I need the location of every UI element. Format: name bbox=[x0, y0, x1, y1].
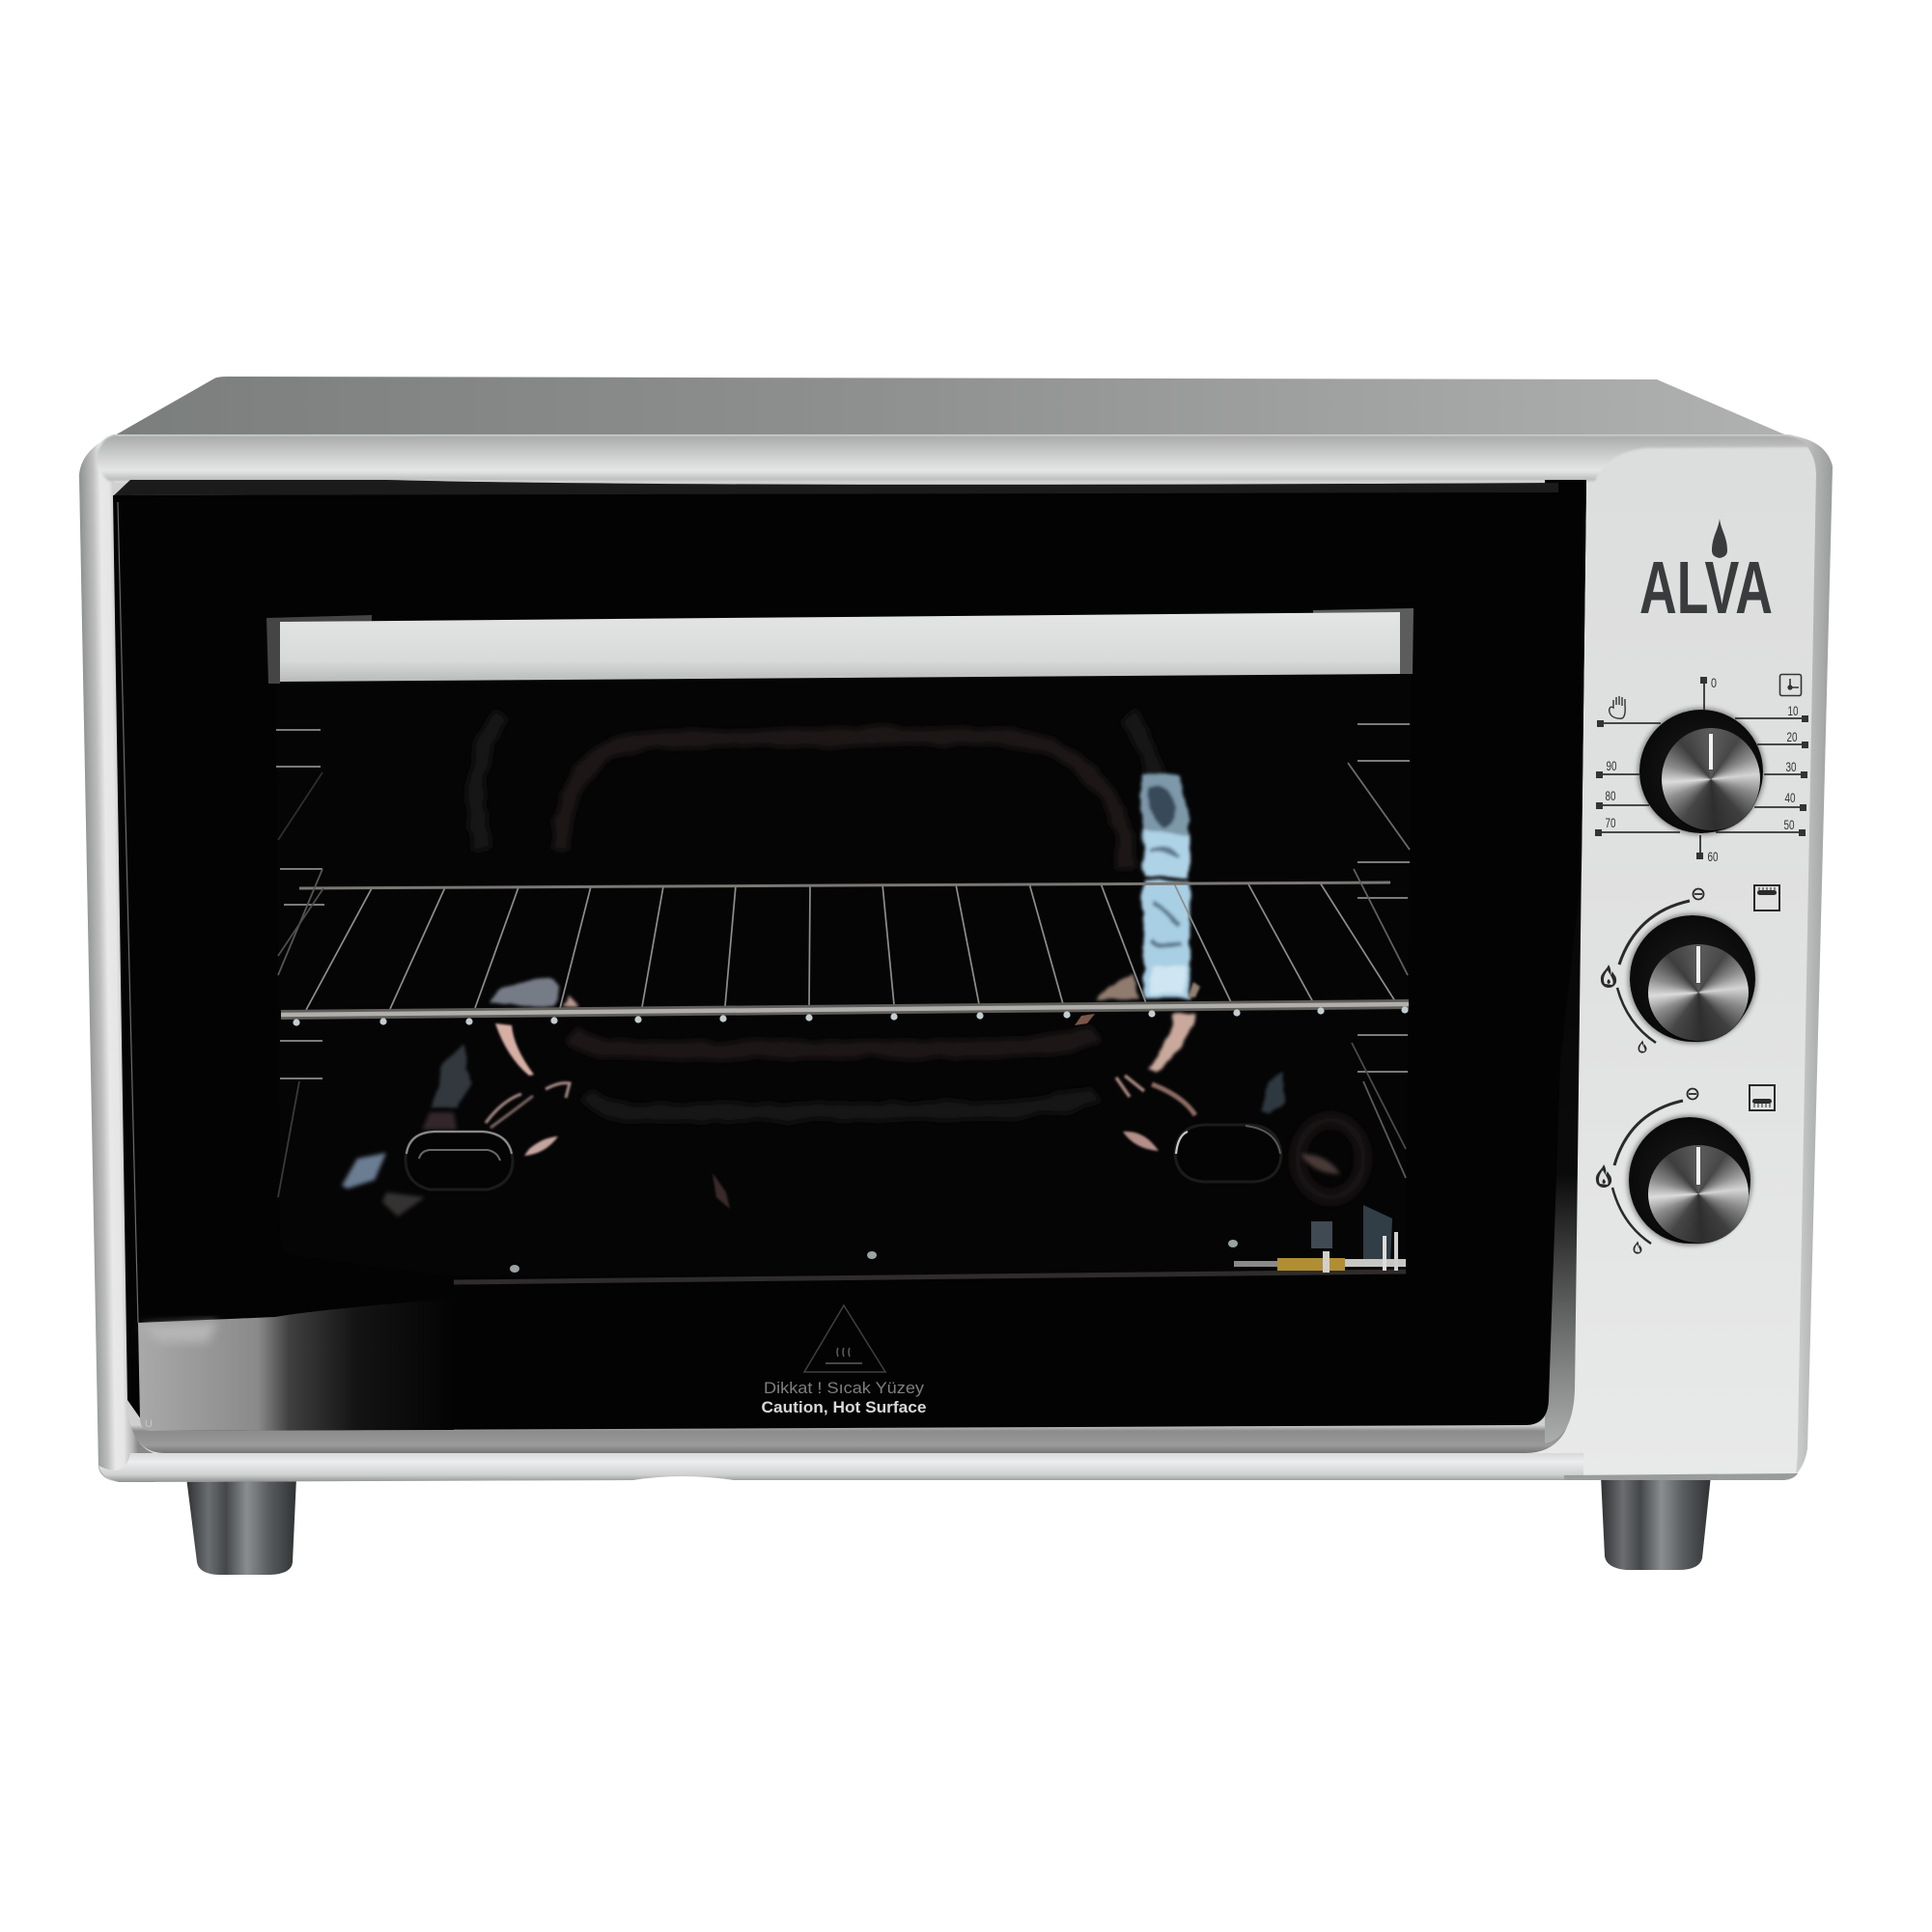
knob: timer bbox=[1635, 705, 1768, 838]
icon: timer clock bbox=[1780, 674, 1802, 695]
top wedge of door bbox=[114, 480, 1558, 495]
off symbol bbox=[1688, 1089, 1697, 1099]
hot surface symbol bbox=[826, 1348, 862, 1363]
scale numbers: 80 bbox=[1605, 788, 1616, 803]
knob: top burner bbox=[1625, 910, 1760, 1047]
oven top surface bbox=[113, 377, 1789, 436]
scale numbers bbox=[1605, 675, 1799, 864]
icon: large flame bbox=[1601, 965, 1616, 988]
rack front bar bbox=[281, 1004, 1409, 1015]
faint heating element reflections bbox=[476, 714, 1160, 1113]
left side band bbox=[79, 434, 164, 1482]
handle left bracket bbox=[266, 615, 372, 684]
scale numbers: 30 bbox=[1786, 759, 1797, 774]
lower frame band bbox=[98, 1453, 1583, 1482]
pink streak, right bbox=[1148, 1014, 1194, 1072]
bottom burner dial markings bbox=[1596, 1085, 1775, 1254]
logo wordmark: ALVA bbox=[1639, 546, 1773, 630]
burner highlights, right bbox=[1116, 1076, 1195, 1115]
burner highlights, left bbox=[486, 1083, 570, 1128]
caution label bbox=[761, 1305, 927, 1416]
left shelf guides bbox=[276, 730, 324, 1197]
knob: bottom burner bbox=[1624, 1112, 1755, 1248]
logo flame bbox=[1712, 518, 1727, 558]
right side band bbox=[1796, 436, 1833, 1474]
icon: large flame bbox=[1596, 1164, 1611, 1188]
scale lines bbox=[1598, 681, 1806, 856]
floor screws bbox=[510, 1240, 1238, 1273]
foot: left bbox=[186, 1477, 296, 1575]
door recess bbox=[113, 480, 1586, 1453]
scale numbers: 60 bbox=[1707, 849, 1719, 864]
rack studs bbox=[293, 1006, 1409, 1026]
glare lighter patch bbox=[141, 1322, 217, 1342]
oven body shell bbox=[79, 434, 1833, 1482]
handle bar bbox=[280, 612, 1400, 682]
dim oval, right bbox=[1298, 1120, 1363, 1197]
glint above rack, left bbox=[490, 978, 577, 1006]
scale numbers: 10 bbox=[1788, 703, 1799, 718]
rack back rail bbox=[299, 882, 1390, 888]
handle right bracket bbox=[1313, 608, 1414, 674]
brand logo bbox=[1639, 518, 1773, 630]
door right reflective strip bbox=[1545, 480, 1586, 1443]
caution text: english: Caution, Hot Surface bbox=[761, 1398, 927, 1416]
right shelf guides bbox=[1348, 724, 1410, 1178]
warm and cool reflection glints bbox=[342, 975, 1363, 1217]
scale numbers: 20 bbox=[1786, 729, 1798, 744]
mottled grey, left bbox=[432, 1043, 470, 1107]
arc scale bbox=[1619, 901, 1690, 965]
scale numbers: 0 bbox=[1711, 675, 1717, 690]
arc scale bbox=[1614, 1101, 1683, 1165]
top burner dial markings bbox=[1601, 885, 1779, 1053]
upper frame band bbox=[97, 435, 1809, 481]
glass edge highlight bbox=[118, 502, 138, 1323]
door glass bbox=[113, 483, 1586, 1431]
timer dial markings bbox=[1595, 674, 1808, 864]
burner cap right bbox=[1175, 1125, 1281, 1182]
off symbol bbox=[1694, 888, 1703, 900]
rack wires bbox=[306, 882, 1395, 1010]
gas burner fitting bbox=[1234, 1205, 1406, 1273]
scale numbers: 40 bbox=[1784, 790, 1796, 805]
icon: manual hand bbox=[1610, 696, 1625, 718]
scale end squares bbox=[1595, 677, 1808, 859]
scale numbers: 70 bbox=[1605, 815, 1616, 830]
blue patch, left bbox=[342, 1153, 386, 1189]
caution triangle bbox=[804, 1305, 885, 1372]
icon: bottom heat oven bbox=[1750, 1085, 1775, 1110]
panel bottom edge bbox=[1564, 1473, 1798, 1480]
oven floor line bbox=[454, 1272, 1406, 1282]
icon: small flame bbox=[1638, 1040, 1646, 1053]
dim grey, right bbox=[1262, 1072, 1284, 1114]
oven window bbox=[276, 674, 1412, 1282]
door handle bbox=[266, 608, 1414, 684]
glare on lower left of glass bbox=[138, 1299, 454, 1431]
pink streak, left bbox=[495, 1023, 534, 1076]
foot: right bbox=[1601, 1475, 1711, 1570]
small mark: U bbox=[145, 1418, 153, 1430]
icon: top heat oven bbox=[1754, 885, 1779, 910]
tan glints above rack, right bbox=[1096, 975, 1137, 999]
burner cap left bbox=[406, 1132, 513, 1190]
caution text: turkish: Dikkat ! Sıcak Yüzey bbox=[764, 1379, 925, 1397]
blue light reflection bbox=[1141, 773, 1190, 998]
scale numbers: 50 bbox=[1784, 817, 1795, 832]
icon: small flame bbox=[1634, 1241, 1641, 1254]
scale numbers: 90 bbox=[1607, 758, 1617, 773]
